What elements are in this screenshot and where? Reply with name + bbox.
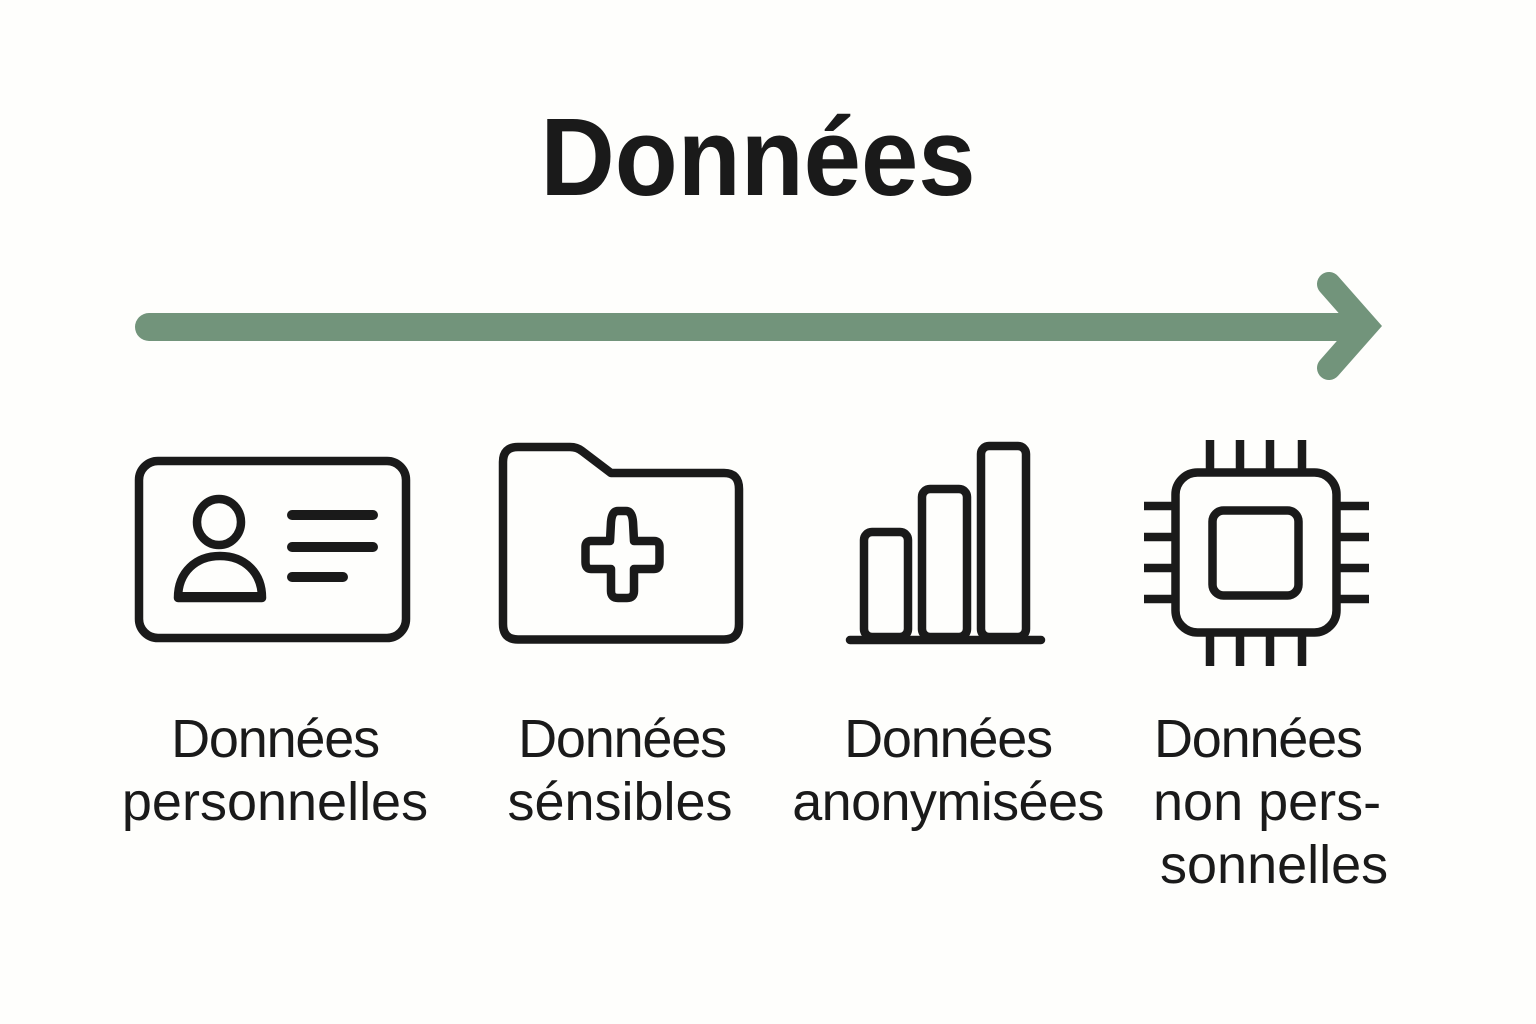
label: anonymised data — [792, 709, 1104, 832]
icon: id card — [139, 461, 406, 638]
label: anonymised data: Données — [844, 709, 1052, 769]
icon: microchip — [1144, 440, 1369, 666]
arrow — [149, 284, 1366, 368]
icon: medical folder — [503, 447, 739, 640]
label: anonymised data: anonymisées — [792, 772, 1104, 832]
label: sensitive data: Données — [518, 709, 726, 769]
label: non-personal data: non pers- — [1153, 772, 1381, 832]
label: personal data: Données — [171, 709, 379, 769]
label: personal data: personnelles — [122, 772, 428, 832]
label: non-personal data — [1153, 709, 1388, 895]
icon: bar chart — [850, 446, 1041, 640]
title: Données — [540, 96, 976, 219]
label: sensitive data: sénsibles — [507, 772, 733, 832]
label: sensitive data — [507, 709, 733, 832]
label: non-personal data: sonnelles — [1160, 835, 1388, 895]
label: personal data — [122, 709, 428, 832]
label: non-personal data: Données — [1154, 709, 1362, 769]
